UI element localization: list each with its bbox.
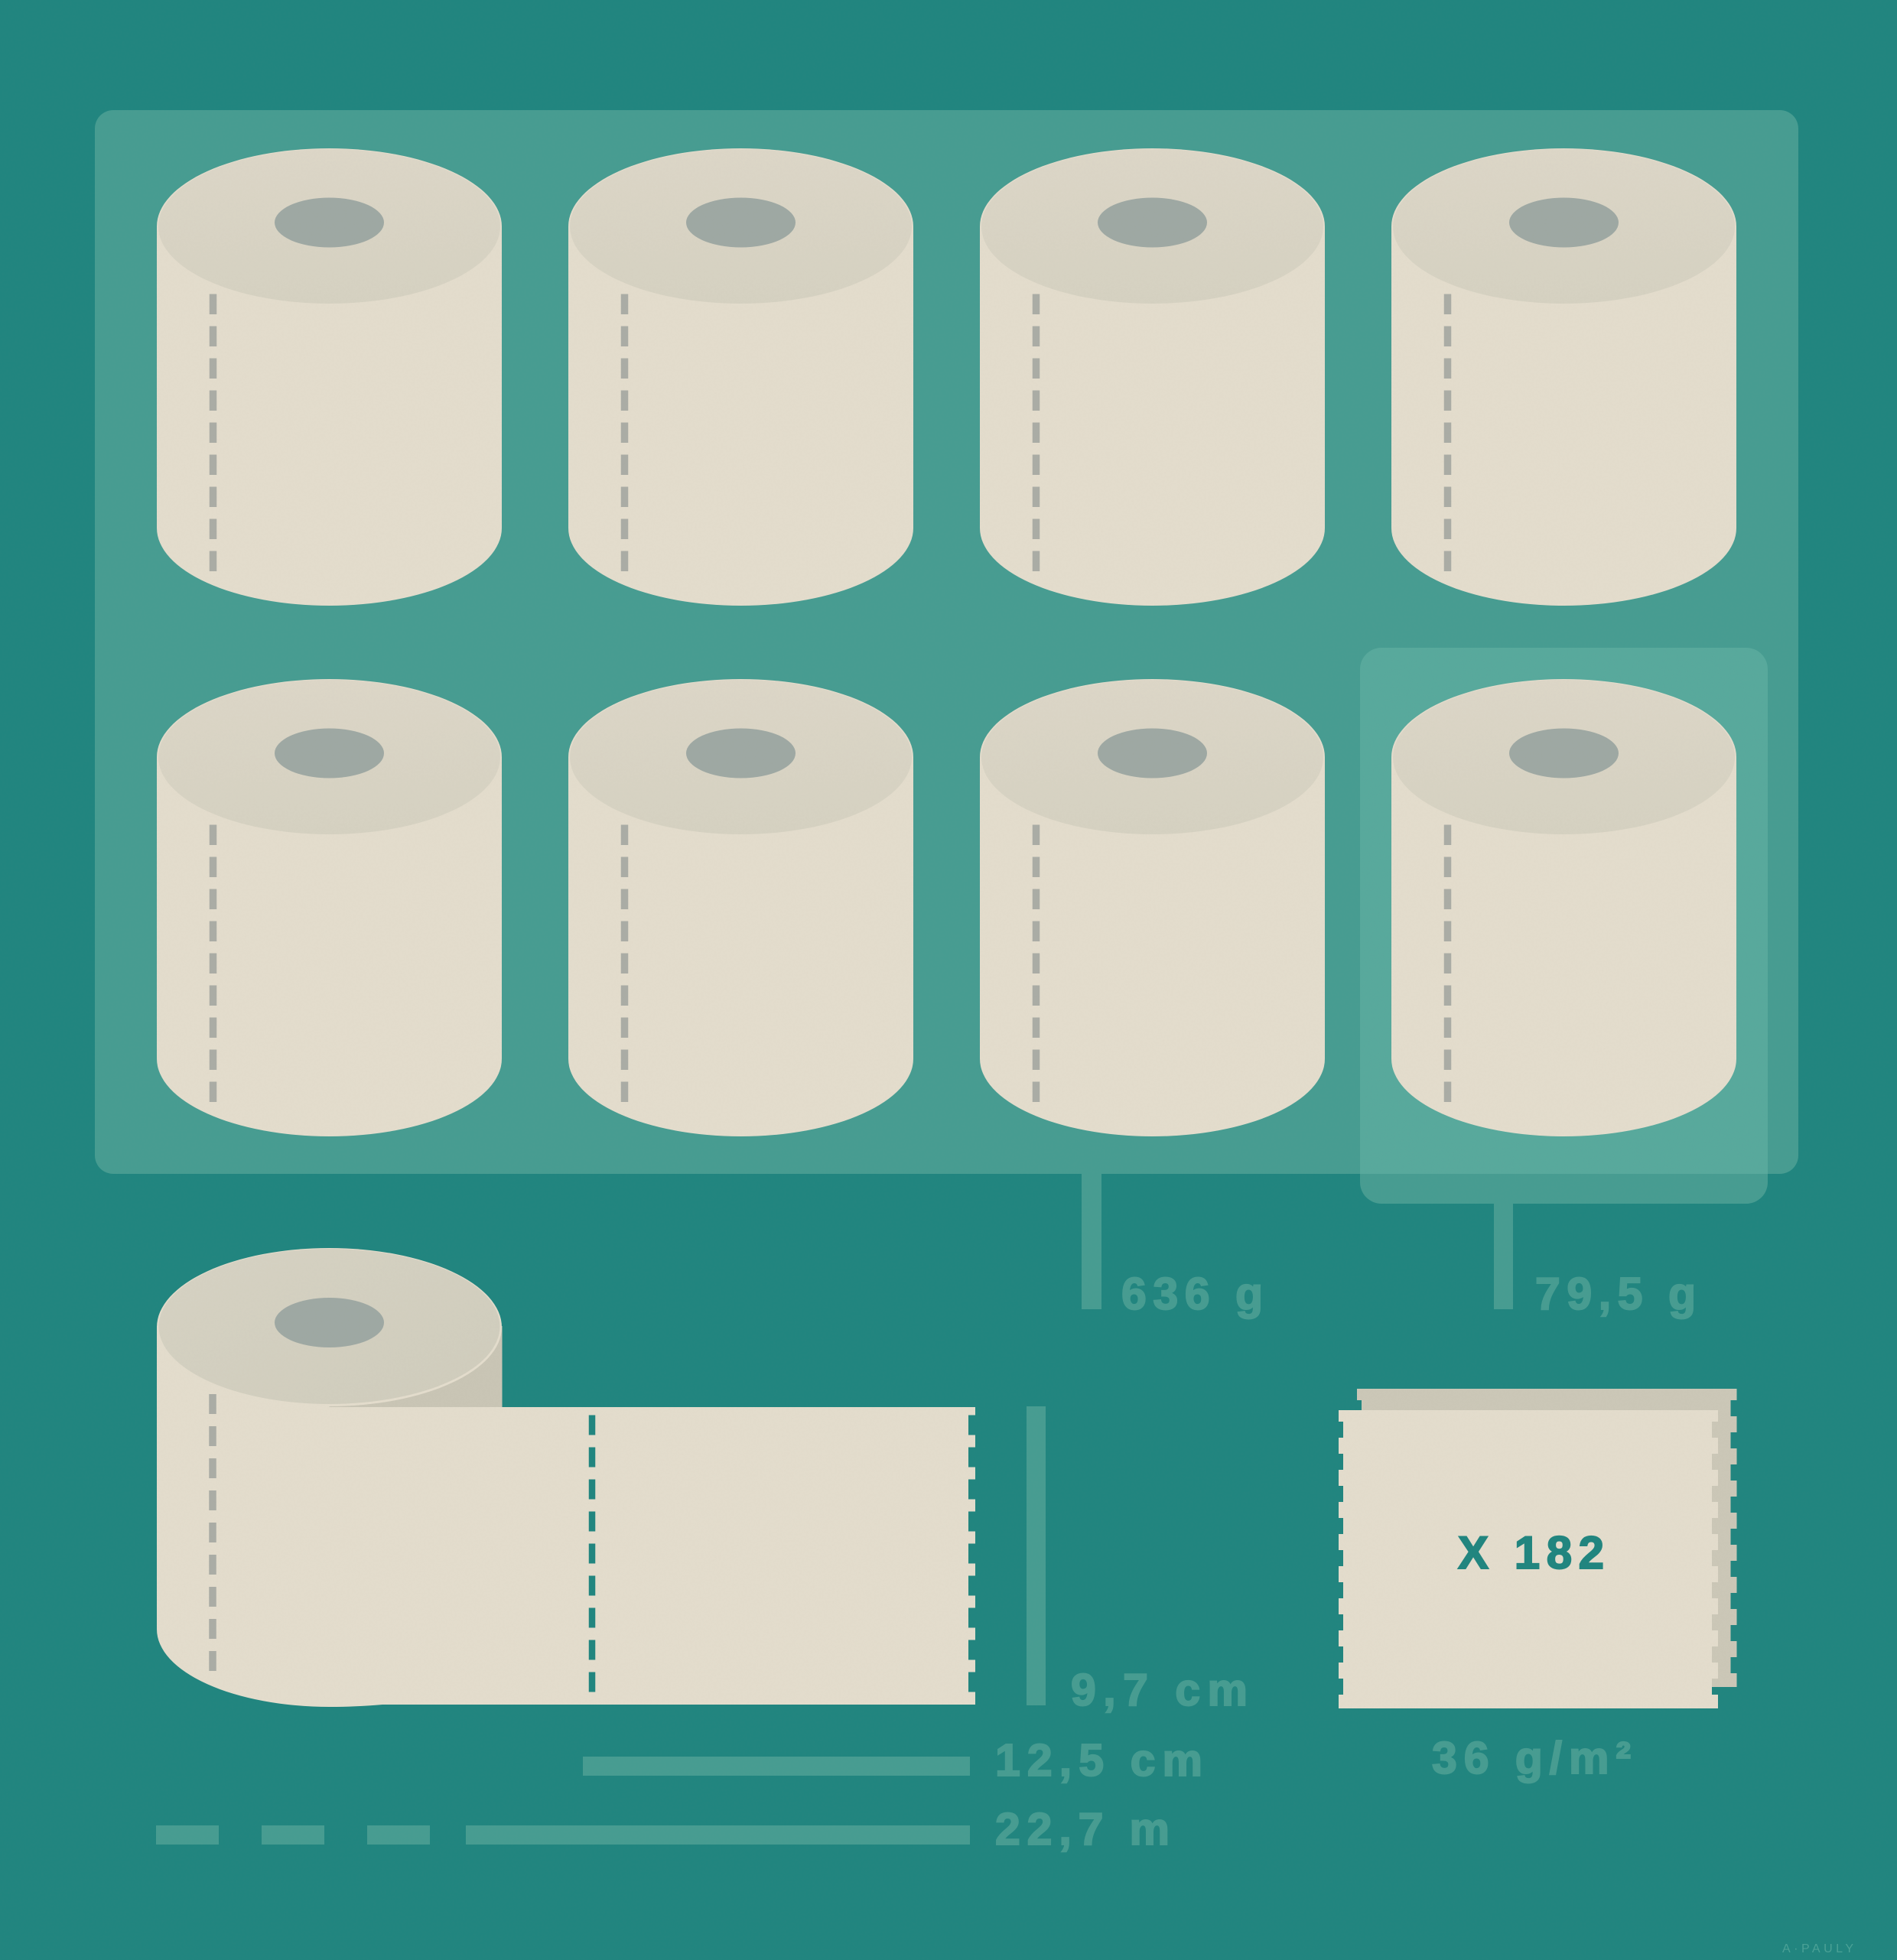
roll 6, row 2 xyxy=(568,679,913,1136)
panel: eight-roll pack xyxy=(95,110,1798,1174)
roll top rim xyxy=(157,1248,502,1406)
sheet height label: 9,7 cm xyxy=(1071,1665,1248,1715)
panel: single-roll highlight xyxy=(1360,648,1768,1204)
roll shadow side xyxy=(329,1326,502,1407)
back sheet xyxy=(1357,1389,1736,1687)
roll 4, row 1 xyxy=(1391,148,1736,606)
roll 2, row 1 xyxy=(568,148,913,606)
single roll weight stem xyxy=(1494,1204,1513,1309)
unrolled roll with sheet xyxy=(157,1248,975,1707)
front sheet xyxy=(1339,1410,1718,1708)
sheet width label: 12,5 cm xyxy=(995,1735,1202,1786)
roll core hole xyxy=(275,1298,384,1347)
single roll weight label: 79,5 g xyxy=(1535,1269,1696,1319)
roll 3, row 1 xyxy=(980,148,1325,606)
sheet perforation xyxy=(589,1415,595,1692)
stack of sheets xyxy=(1339,1389,1736,1708)
roll 5, row 2 xyxy=(157,679,502,1136)
paper weight label: 36 g/m² xyxy=(1432,1733,1631,1783)
pack weight stem xyxy=(1082,1174,1101,1309)
roll 7, row 2 xyxy=(980,679,1325,1136)
pack weight label: 636 g xyxy=(1121,1269,1263,1319)
sheet height bar xyxy=(1027,1406,1046,1705)
roll top face xyxy=(159,1249,500,1404)
sheet width bar xyxy=(583,1757,970,1776)
roll 1, row 1 xyxy=(157,148,502,606)
torn sheet edge xyxy=(968,1415,975,1692)
roll 8, row 2 (highlighted) xyxy=(1391,679,1736,1136)
roll perforation xyxy=(209,1394,216,1671)
roll body xyxy=(157,1326,975,1707)
roll length label: 22,7 m xyxy=(995,1804,1170,1854)
roll length dashed bar xyxy=(156,1825,970,1845)
sheet count label: X 182 xyxy=(1458,1527,1604,1578)
signature: A·PAULY xyxy=(1782,1942,1853,1955)
